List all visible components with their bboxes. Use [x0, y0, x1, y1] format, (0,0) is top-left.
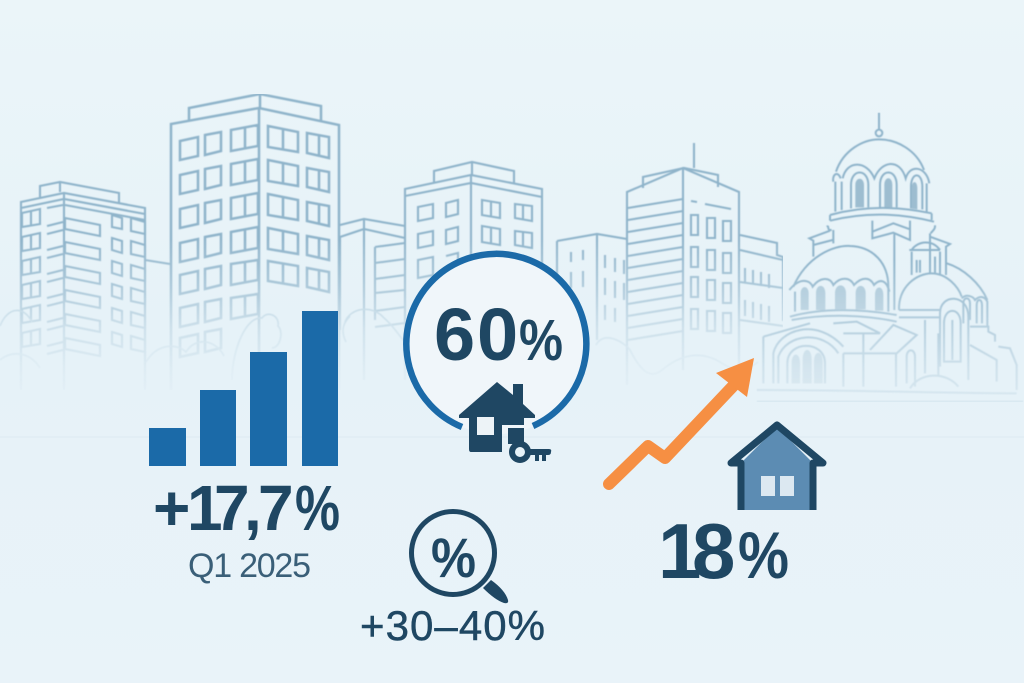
building: centre	[405, 162, 542, 380]
cathedral: lower arches and base	[757, 322, 1023, 402]
icon: house with key	[459, 382, 551, 461]
stat: 18%: 18	[658, 507, 735, 595]
bar 2	[200, 390, 236, 466]
bar 3	[250, 352, 287, 466]
cathedral: spire and main dome	[827, 113, 935, 233]
stat: 18%	[658, 507, 789, 595]
bar 1	[149, 428, 186, 466]
building: low centre-right	[557, 234, 627, 340]
circle with 60%	[406, 254, 587, 434]
bar 4	[302, 311, 338, 466]
cathedral: left dome	[789, 231, 897, 322]
icon: blue house	[731, 425, 823, 510]
skyline of apartment buildings	[0, 94, 783, 390]
building: tall left	[171, 94, 339, 390]
building: low centre-left	[340, 219, 405, 380]
building: tower with antenna	[627, 143, 739, 385]
stat: +17,7%: +17,7	[153, 472, 294, 544]
label: Q1 2025: Q1 2025	[188, 547, 311, 585]
building: far left	[21, 182, 170, 390]
stat: 18%: %	[738, 518, 789, 592]
icon: magnifying glass with percent: %	[431, 526, 476, 589]
stat: +30–40%: +30–40%	[360, 602, 545, 649]
bar chart	[149, 311, 338, 466]
icon: magnifying glass with percent	[412, 512, 508, 603]
tree outlines	[0, 308, 708, 360]
building: low right	[740, 235, 783, 326]
stat: 60%: 60	[434, 293, 518, 376]
cathedral: right domes and apse	[899, 237, 1017, 390]
cathedral: central gable	[833, 221, 930, 310]
stat: 60%: %	[519, 308, 563, 373]
cathedral	[757, 113, 1023, 402]
ground line	[0, 436, 1024, 438]
arrow: rising orange trend	[609, 358, 754, 484]
stat: +17,7%: %	[295, 472, 340, 544]
stat: 60%	[434, 293, 563, 376]
